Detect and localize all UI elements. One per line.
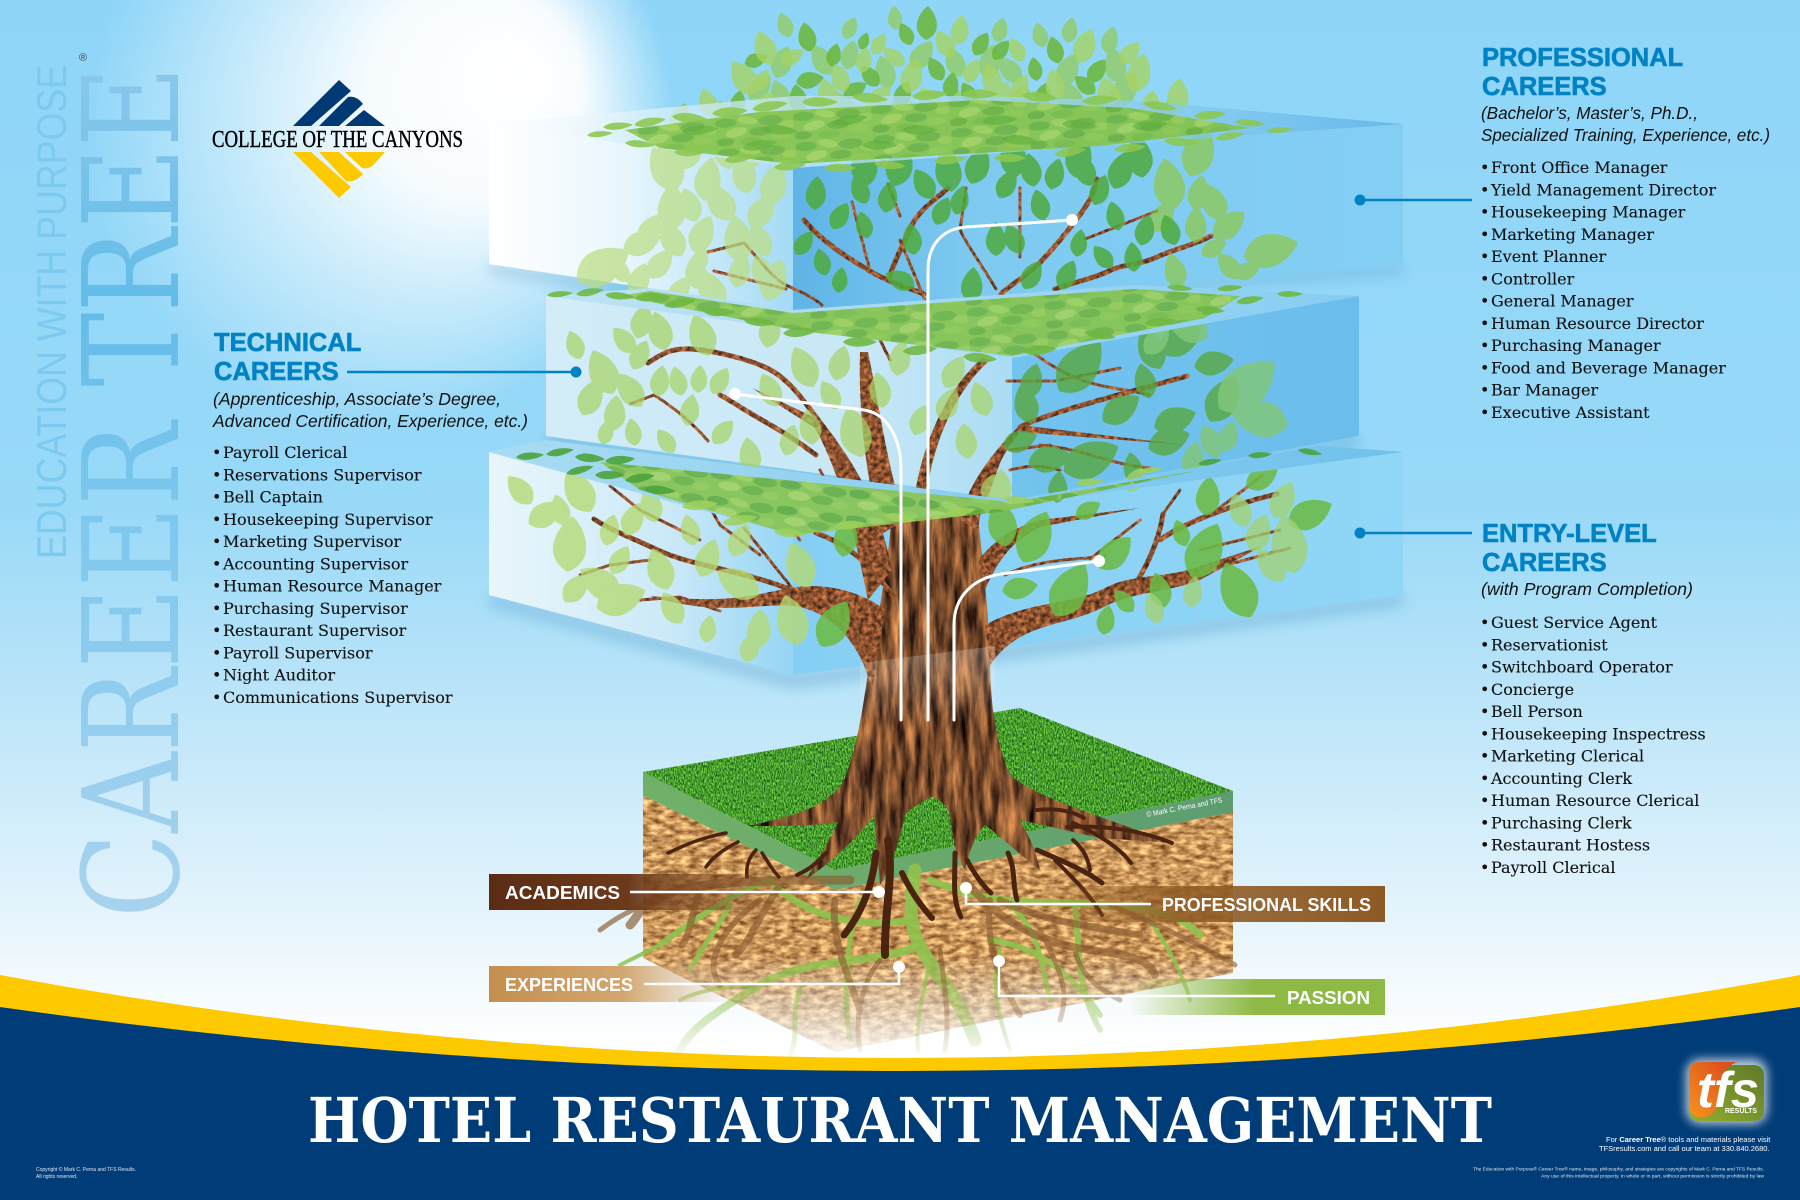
list: Yield Management Director (1490, 180, 1716, 199)
list: • (1480, 680, 1489, 699)
heading: ENTRY-LEVEL (1482, 520, 1657, 548)
experiences label: EXPERIENCES (505, 975, 633, 995)
passion roots (620, 870, 1200, 1055)
academics label: ACADEMICS (505, 883, 620, 903)
vertical title: career tree (28, 52, 210, 918)
right light leaves (1137, 302, 1293, 479)
callout: entry connector (1354, 528, 1472, 538)
passion label: PASSION (1287, 988, 1370, 1008)
connector lines in tree (729, 214, 1105, 720)
left copyright: Copyright © Mark C. Perna and TFS Results. (36, 1166, 136, 1173)
list: Payroll Clerical (223, 443, 347, 462)
list: • (1480, 180, 1489, 199)
grass surface (643, 708, 1233, 870)
logo results: RESULTS (1725, 1106, 1757, 1115)
list: • (212, 488, 221, 506)
technical tier leaves (562, 301, 1293, 505)
panel: technical careers (212, 329, 528, 707)
entry-level box faces (489, 452, 1403, 675)
trunk haze (860, 646, 995, 725)
list: Marketing Supervisor (223, 532, 402, 551)
list: Event Planner (1491, 247, 1607, 266)
tree (580, 179, 1290, 955)
legal text: Any use of this intellectual property, in whole or in part, without permission is strictly prohibited by law (1541, 1174, 1765, 1179)
list: Reservations Supervisor (223, 465, 422, 484)
dark main roots (668, 809, 1172, 955)
list: Payroll Supervisor (223, 643, 373, 662)
yellow swoosh (0, 975, 1800, 1200)
professional plane (489, 89, 1403, 172)
list: • (1480, 202, 1489, 222)
list: Marketing Clerical (1491, 747, 1644, 766)
list: • (1480, 791, 1489, 810)
logo olive panel (1689, 1065, 1764, 1121)
layer backgrounds (489, 124, 1403, 675)
logo mountains (293, 80, 385, 126)
list: Restaurant Supervisor (223, 621, 407, 640)
passion label (993, 955, 1385, 1015)
list: Executive Assistant (1491, 403, 1650, 422)
list: Guest Service Agent (1491, 613, 1658, 632)
inner dark leaves (789, 132, 1184, 304)
list: Communications Supervisor (223, 688, 453, 707)
list: • (1480, 269, 1489, 288)
contact text: For Career Tree® tools and materials please visit (1606, 1135, 1770, 1144)
list: Bell Person (1491, 702, 1583, 721)
professional connector (928, 214, 1078, 720)
list: • (212, 532, 221, 551)
right dark leaves (999, 316, 1249, 504)
grass edge (643, 772, 1233, 890)
list: • (1480, 292, 1489, 311)
professional plane inner leaves (682, 112, 1168, 153)
list: Marketing Manager (1491, 225, 1654, 244)
list: • (1480, 225, 1489, 244)
list: • (1480, 403, 1489, 422)
list: • (212, 577, 221, 596)
branches (580, 179, 1290, 611)
list: Controller (1491, 269, 1575, 288)
list: Human Resource Director (1491, 314, 1704, 333)
logo: college of the canyons (212, 80, 463, 198)
technical plane edge leaves (547, 284, 1303, 364)
professional tier leaves (568, 122, 1302, 315)
pale left leaves (562, 301, 1012, 505)
entry tier leaves (500, 460, 1338, 665)
list: Purchasing Clerk (1491, 813, 1632, 832)
list: • (212, 554, 221, 573)
logo wordmark: COLLEGE OF THE CANYONS (212, 127, 463, 153)
list: • (212, 688, 221, 707)
list: Housekeeping Supervisor (223, 510, 433, 529)
sun glow (0, 0, 760, 520)
list: • (1480, 836, 1489, 855)
right green leaves (808, 460, 1338, 654)
list: • (1480, 702, 1489, 721)
academics label (489, 874, 885, 910)
pale left leaves (500, 463, 822, 665)
list: Food and Beverage Manager (1491, 358, 1726, 377)
list: • (212, 465, 221, 484)
trunk (748, 515, 1172, 885)
subtitle: (Bachelor’s, Master’s, Ph.D., (1481, 103, 1698, 123)
list: Purchasing Supervisor (223, 599, 408, 618)
list: Accounting Supervisor (222, 554, 409, 573)
list: Switchboard Operator (1491, 658, 1673, 676)
list: • (1480, 381, 1489, 400)
list: Human Resource Manager (223, 577, 442, 596)
logo glow (1686, 1059, 1767, 1124)
list: Bar Manager (1491, 381, 1599, 400)
list: • (212, 510, 221, 529)
legal text: The Education with Purpose® Career Tree® name, image, philosophy, and strategies are copyrights of Mark C. Perna and TFS Results. (1473, 1167, 1764, 1172)
list: Accounting Clerk (1490, 769, 1632, 788)
footer band (0, 975, 1800, 1200)
subtitle: (with Program Completion) (1481, 579, 1693, 599)
list: • (212, 666, 221, 685)
professional skills label (960, 882, 1385, 922)
title: HOTEL RESTAURANT MANAGEMENT (308, 1084, 1492, 1157)
contact text: TFSresults.com and call our team at 330.840.2680. (1599, 1144, 1770, 1153)
list: Night Auditor (223, 666, 335, 685)
logo letters: tfs (1697, 1062, 1759, 1118)
foliage (500, 5, 1338, 665)
list: Front Office Manager (1491, 158, 1668, 177)
list: • (1480, 613, 1489, 632)
list: • (1480, 658, 1489, 676)
heading: CAREERS (1482, 73, 1607, 101)
entry plane light leaves (682, 465, 1163, 539)
list: General Manager (1491, 292, 1634, 311)
subtitle: Advanced Certification, Experience, etc.) (212, 411, 528, 431)
list: • (1480, 247, 1489, 266)
list: • (212, 443, 221, 462)
subtitle: (Apprenticeship, Associate’s Degree, (213, 389, 501, 409)
logo orange panel (1689, 1062, 1738, 1117)
box shadows (489, 264, 1403, 687)
entry plane dark leaves (516, 446, 1322, 496)
right outer leaves (1145, 122, 1302, 291)
professional box faces (489, 124, 1403, 310)
icon: tfs results logo (1686, 1059, 1767, 1124)
list: • (1480, 858, 1489, 877)
subtitle: Specialized Training, Experience, etc.) (1481, 125, 1770, 145)
list: Housekeeping Inspectress (1491, 724, 1706, 743)
canopy light leaves (695, 14, 1190, 128)
list: Concierge (1491, 680, 1574, 699)
left copyright: All rights reserved. (36, 1174, 77, 1180)
list: Bell Captain (223, 488, 323, 506)
copyright on grass: © Mark C. Perna and TFS (1146, 795, 1223, 819)
callout: technical connector (347, 366, 582, 378)
entry connector (954, 555, 1105, 720)
logo reflection (293, 152, 385, 198)
right light leaves (1121, 464, 1312, 626)
technical connector (729, 388, 901, 720)
heading: TECHNICAL (214, 329, 361, 357)
list: • (1480, 358, 1489, 377)
list: • (1480, 158, 1489, 177)
list: • (212, 599, 221, 618)
panel: professional careers (1480, 44, 1770, 422)
pale left leaves (568, 127, 797, 315)
heading: CAREERS (1482, 549, 1607, 577)
list: • (1480, 724, 1489, 743)
list: Purchasing Manager (1491, 336, 1661, 355)
canopy mid green leaves (728, 5, 1112, 117)
list: • (1480, 747, 1489, 766)
registered mark: ® (79, 52, 87, 64)
list: • (1480, 635, 1489, 654)
professional plane edge leaves (587, 89, 1293, 172)
panel: entry-level careers (1480, 520, 1706, 877)
list: • (1480, 314, 1489, 333)
big limbs (650, 352, 1262, 690)
list: • (1480, 769, 1489, 788)
list: Payroll Clerical (1491, 858, 1615, 877)
heading: PROFESSIONAL (1482, 44, 1683, 72)
entry plane (489, 440, 1403, 539)
soil block (643, 795, 1233, 1052)
list: • (212, 643, 221, 662)
technical box faces (546, 296, 1359, 500)
navy band (0, 1007, 1800, 1200)
list: Human Resource Clerical (1491, 791, 1699, 810)
professional skills label: PROFESSIONAL SKILLS (1162, 895, 1371, 915)
root labels (489, 874, 1385, 1015)
callout: professional connector (1354, 194, 1472, 206)
list: Housekeeping Manager (1491, 202, 1686, 222)
canopy extra leaves (666, 5, 1204, 148)
ground cube (643, 708, 1233, 1052)
list: Restaurant Hostess (1491, 836, 1650, 855)
leafy planes (489, 89, 1403, 539)
roots (600, 870, 1235, 1055)
experience roots (600, 880, 1235, 1050)
canopy top (666, 5, 1204, 148)
experiences label (489, 961, 905, 1002)
technical plane (546, 284, 1359, 364)
list: • (212, 621, 221, 640)
heading: CAREERS (214, 358, 339, 386)
list: • (1480, 813, 1489, 832)
list: • (1480, 336, 1489, 355)
list: Reservationist (1491, 635, 1608, 654)
